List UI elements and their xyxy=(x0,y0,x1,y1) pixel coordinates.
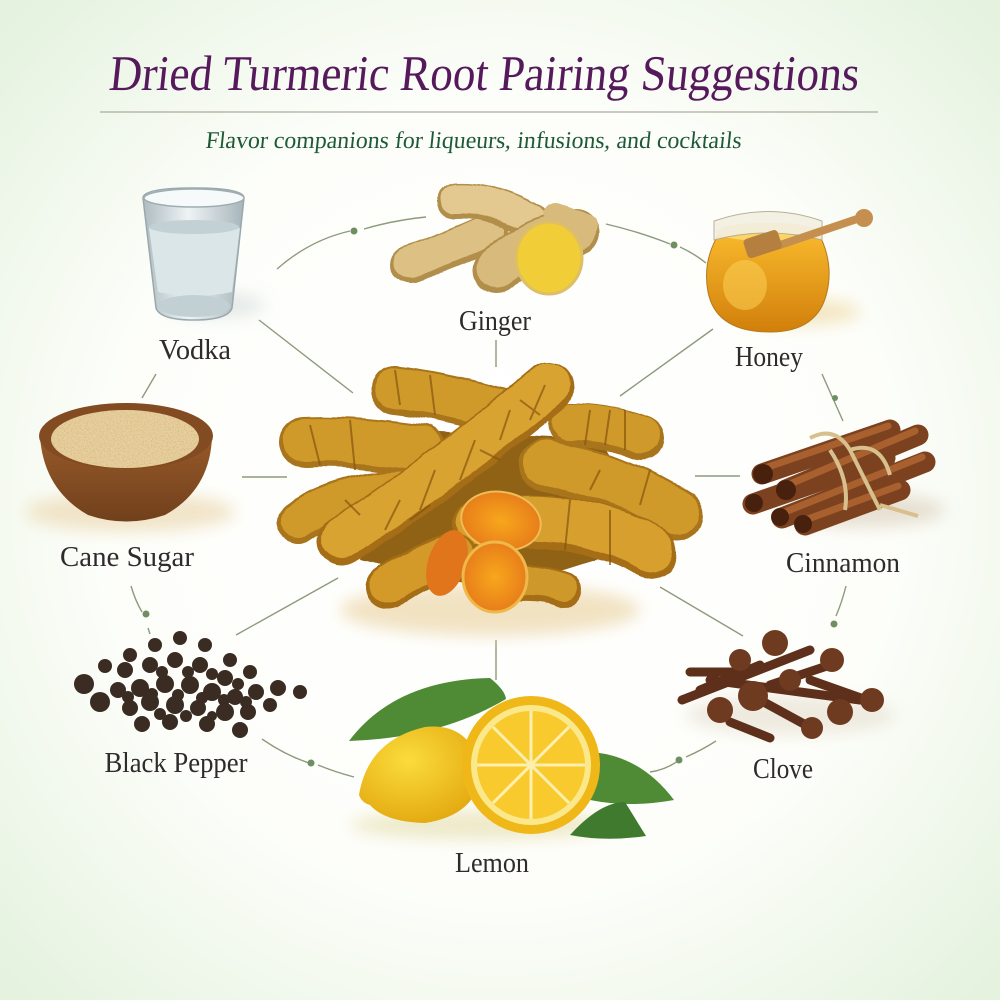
label: Lemon: Lemon xyxy=(455,847,529,879)
icon: cinnamon bundle xyxy=(745,426,945,533)
label: Ginger: Ginger xyxy=(459,305,531,337)
label: Clove: Clove xyxy=(753,753,813,785)
label: Black Pepper: Black Pepper xyxy=(104,747,248,779)
icon: sugar bowl xyxy=(25,403,235,532)
icon: black pepper xyxy=(74,631,307,738)
title: Dried Turmeric Root Pairing Suggestions xyxy=(107,45,863,101)
icon: vodka glass xyxy=(143,188,265,320)
icon: honey jar xyxy=(706,209,873,332)
label: Vodka: Vodka xyxy=(159,334,231,366)
icon: cloves xyxy=(682,630,895,739)
subtitle: Flavor companions for liqueurs, infusions, and cocktails xyxy=(204,128,743,154)
connector dots xyxy=(142,228,838,766)
label: Honey: Honey xyxy=(735,341,803,373)
connector lines xyxy=(131,217,846,777)
label: Cane Sugar: Cane Sugar xyxy=(60,541,194,573)
icon: ginger xyxy=(410,198,585,294)
icon: lemon xyxy=(349,678,674,840)
labels xyxy=(60,305,900,879)
label: Cinnamon: Cinnamon xyxy=(786,547,900,579)
icon: central turmeric pile xyxy=(298,370,678,636)
